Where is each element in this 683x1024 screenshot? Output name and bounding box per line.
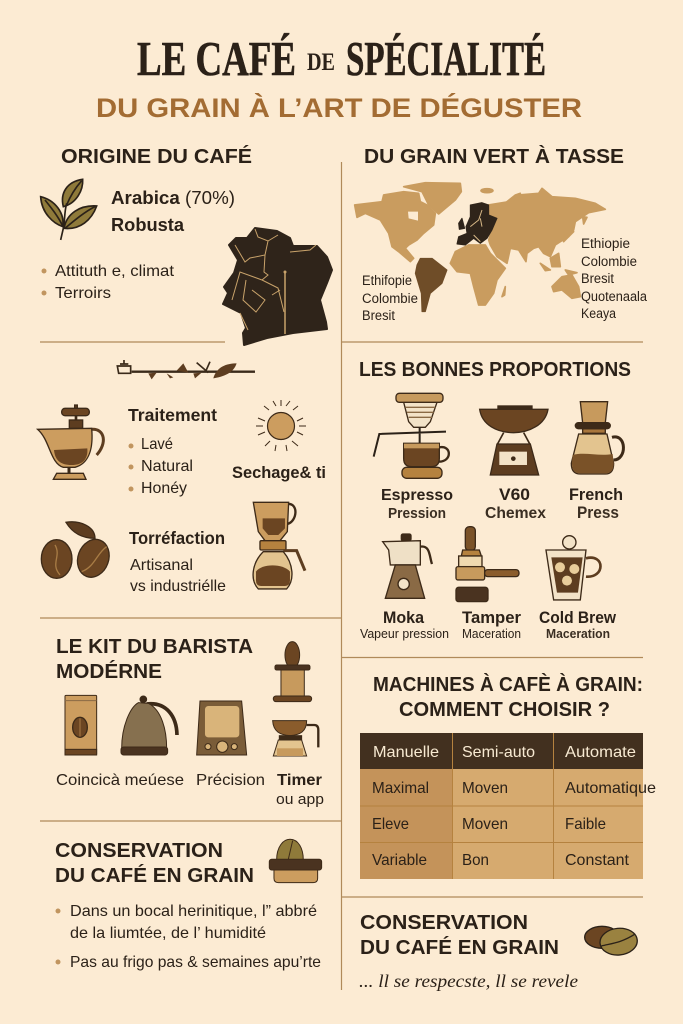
comparison table: Faible bbox=[565, 816, 606, 833]
traitement text: Honéy bbox=[141, 480, 187, 497]
comparison table: Eleve bbox=[372, 816, 409, 833]
icon: pour-over pitcher bbox=[38, 405, 103, 479]
icon: V60 bbox=[480, 406, 548, 475]
torréfaction text: vs industriélle bbox=[130, 578, 226, 595]
panel: le kit du barista bbox=[56, 635, 324, 808]
comparison table bbox=[360, 733, 656, 879]
heading: conservation droite: DU CAFÉ EN GRAIN bbox=[360, 936, 559, 959]
heading: conservation droite: CONSERVATION bbox=[360, 911, 528, 934]
heading: grain vert: DU GRAIN VERT À TASSE bbox=[364, 145, 624, 168]
heading: origine: ORIGINE DU CAFÉ bbox=[61, 145, 252, 168]
icon: coffee beans bbox=[41, 522, 114, 582]
heading: proportions: LES BONNES PROPORTIONS bbox=[359, 358, 631, 381]
labels: left origins: Ethifopie bbox=[362, 273, 412, 288]
icon: french press bbox=[571, 402, 623, 474]
label: séchage: Sechage& ti bbox=[232, 464, 326, 482]
bullet list: conservation: de la liumtée, de l’ humidité bbox=[70, 925, 266, 942]
heading: kit bbox=[56, 635, 253, 683]
labels: first row methods: French bbox=[569, 486, 623, 504]
labels: first row methods: Press bbox=[577, 504, 619, 522]
labels: second row methods bbox=[360, 609, 616, 641]
panel: conservation gauche bbox=[55, 839, 322, 971]
panel: les bonnes proportions bbox=[359, 358, 631, 641]
torréfaction text bbox=[129, 528, 226, 595]
comparison table: Constant bbox=[565, 852, 630, 869]
icon: branch divider bbox=[117, 360, 255, 379]
comparison table: Automate bbox=[565, 744, 636, 761]
labels: second row methods: Maceration bbox=[546, 627, 610, 641]
panel: origine du café: Robusta bbox=[111, 215, 185, 235]
labels: right origins: Bresit bbox=[581, 271, 614, 286]
heading: conservation: CONSERVATION bbox=[55, 839, 223, 862]
panel: origine du café bbox=[41, 145, 332, 345]
bullet list: conservation: Pas au frigo pas & semaines apu’rte bbox=[70, 954, 321, 971]
traitement text bbox=[128, 405, 217, 497]
comparison table: Manuelle bbox=[373, 744, 439, 761]
labels: kit tools: ou app bbox=[276, 791, 324, 808]
heading: machines: COMMENT CHOISIR ? bbox=[399, 698, 610, 721]
icon: espresso dripper bbox=[374, 393, 449, 478]
labels: second row methods: Maceration bbox=[462, 627, 521, 641]
labels: kit tools: Coincicà meúese bbox=[56, 772, 184, 789]
labels: second row methods: Cold Brew bbox=[539, 609, 616, 627]
heading: machines bbox=[373, 673, 643, 721]
icon: gooseneck kettle bbox=[121, 696, 177, 755]
bullet list: terroir: Terroirs bbox=[55, 285, 111, 302]
bullet list: conservation bbox=[56, 903, 321, 971]
labels: kit tools bbox=[56, 772, 324, 808]
labels: second row methods: Tamper bbox=[462, 609, 522, 627]
icon: cold brew bbox=[546, 536, 600, 600]
world map bbox=[355, 183, 605, 312]
bullet list: conservation: Dans un bocal herinitique, l” abbré bbox=[70, 903, 317, 920]
comparison table: Automatique bbox=[565, 780, 656, 797]
icon: coffee leaves bbox=[41, 179, 97, 240]
panel: machines à café bbox=[360, 673, 656, 879]
labels: first row methods: Pression bbox=[388, 505, 446, 522]
bullet list: terroir bbox=[42, 263, 175, 302]
icon: moka pot bbox=[383, 534, 432, 598]
torréfaction text: Torréfaction bbox=[129, 528, 225, 548]
labels: kit tools: Timer bbox=[277, 772, 322, 789]
labels: right origins: Quotenaala bbox=[581, 289, 647, 304]
heading: machines: MACHINES À CAFÈ À GRAIN: bbox=[373, 673, 643, 696]
comparison table: Maximal bbox=[372, 780, 429, 797]
comparison table: Variable bbox=[372, 852, 427, 869]
labels: left origins bbox=[362, 273, 418, 323]
traitement text: Traitement bbox=[128, 405, 217, 425]
panel: traitement et torréfaction bbox=[38, 360, 326, 595]
labels: first row methods bbox=[381, 486, 623, 522]
title bbox=[137, 31, 546, 86]
icon: storage jar bbox=[269, 839, 322, 883]
labels: right origins: Ethiopie bbox=[581, 236, 630, 251]
species list: Arabica (70%) bbox=[111, 188, 235, 208]
icon: sun bbox=[256, 400, 306, 451]
bullet list: terroir: Attituth e, climat bbox=[55, 263, 175, 280]
icon: syphon bbox=[253, 502, 305, 589]
subtitle: DU GRAIN À L’ART DE DÉGUSTER bbox=[96, 92, 582, 123]
comparison table: Semi-auto bbox=[462, 744, 535, 761]
panel: conservation droite bbox=[359, 911, 638, 991]
icon: dripper bbox=[273, 721, 318, 756]
traitement text: Lavé bbox=[141, 436, 173, 453]
heading: conservation: DU CAFÉ EN GRAIN bbox=[55, 864, 254, 887]
labels: first row methods: Chemex bbox=[485, 505, 546, 522]
heading: conservation droite bbox=[360, 911, 559, 959]
comparison table: Bon bbox=[462, 852, 489, 869]
icon: tamper bbox=[456, 527, 519, 602]
labels: right origins: Colombie bbox=[581, 254, 637, 269]
comparison table: Moven bbox=[462, 780, 508, 797]
title: SPÉCIALITÉ bbox=[346, 31, 546, 86]
labels: left origins: Colombie bbox=[362, 291, 418, 306]
labels: second row methods: Vapeur pression bbox=[360, 627, 449, 641]
labels: left origins: Bresit bbox=[362, 308, 395, 323]
heading: conservation bbox=[55, 839, 254, 887]
tagline: ... ll se respecste, ll se revele bbox=[359, 971, 578, 991]
icon: grinder bbox=[273, 642, 312, 702]
comparison table: Moven bbox=[462, 816, 508, 833]
title: LE CAFÉ bbox=[137, 31, 296, 86]
torréfaction text: Artisanal bbox=[130, 557, 193, 574]
icon: precision scale bbox=[197, 701, 247, 755]
labels: right origins bbox=[581, 236, 647, 321]
panel: du grain vert à tasse bbox=[355, 145, 647, 323]
map: Côte d'Ivoire bbox=[223, 228, 332, 345]
labels: right origins: Keaya bbox=[581, 306, 616, 321]
icon: canister bbox=[65, 695, 97, 755]
labels: kit tools: Précision bbox=[196, 772, 265, 789]
icon: two beans bbox=[585, 926, 638, 957]
labels: second row methods: Moka bbox=[383, 609, 425, 627]
heading: kit: MODÉRNE bbox=[56, 660, 162, 683]
labels: first row methods: V60 bbox=[499, 486, 530, 504]
traitement text: Natural bbox=[141, 458, 193, 475]
heading: kit: LE KIT DU BARISTA bbox=[56, 635, 253, 658]
labels: first row methods: Espresso bbox=[381, 487, 453, 504]
title: DE bbox=[307, 49, 335, 76]
